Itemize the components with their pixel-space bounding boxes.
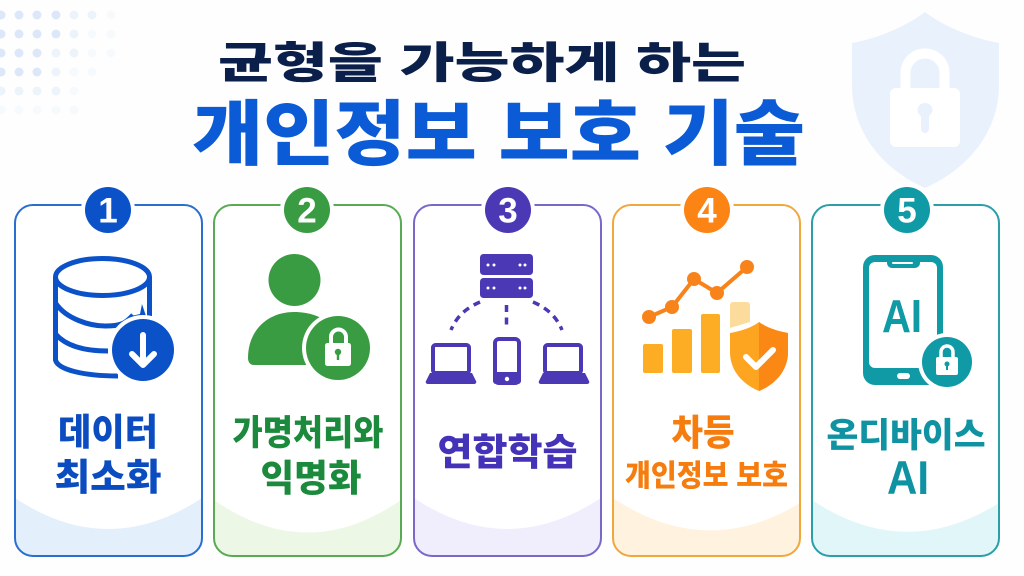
panel: 데이터 최소화 [15, 183, 202, 556]
badge 3 [481, 183, 535, 237]
icon: phone with AI and lock [863, 255, 976, 391]
decorative dot pattern [0, 10, 116, 114]
label: 차등 [672, 404, 734, 456]
panel: 차등 개인정보 보호 [613, 183, 800, 556]
badge 2 [280, 183, 334, 237]
badge 4: 4 [697, 192, 717, 230]
icon: phone with AI and lock: AI [882, 290, 922, 342]
icon: federated server and devices [426, 254, 589, 384]
label [232, 405, 384, 502]
label: 가명처리와 [232, 405, 384, 456]
label: 최소화 [54, 447, 162, 501]
label [54, 402, 162, 501]
title line 1: 균형을 가능하게 하는 [218, 29, 746, 91]
background shield with lock [852, 12, 999, 188]
title line 2: 개인정보 보호 기술 [192, 78, 805, 180]
icon: person with lock [248, 254, 374, 384]
label: 데이터 [58, 402, 158, 456]
panel: 온디바이스 AI [812, 183, 999, 556]
badge 5 [880, 183, 934, 237]
badge 2: 2 [297, 192, 317, 230]
icon: chart with shield [642, 260, 788, 391]
label: 연합학습 [438, 422, 578, 476]
label: 개인정보 보호 [625, 451, 788, 495]
panel: 연합학습 [414, 183, 601, 556]
label: 온디바이스 [826, 408, 986, 457]
label [625, 404, 788, 495]
panel: 가명처리와 익명화 [214, 183, 401, 556]
label: AI [887, 451, 929, 504]
badge 5: 5 [897, 192, 917, 230]
icon: database with download [56, 258, 178, 385]
badge 4 [680, 183, 734, 237]
badge 1 [81, 183, 135, 237]
label: 익명화 [260, 448, 362, 502]
badge 3: 3 [498, 192, 518, 230]
label [826, 408, 986, 504]
badge 1: 1 [98, 192, 118, 230]
